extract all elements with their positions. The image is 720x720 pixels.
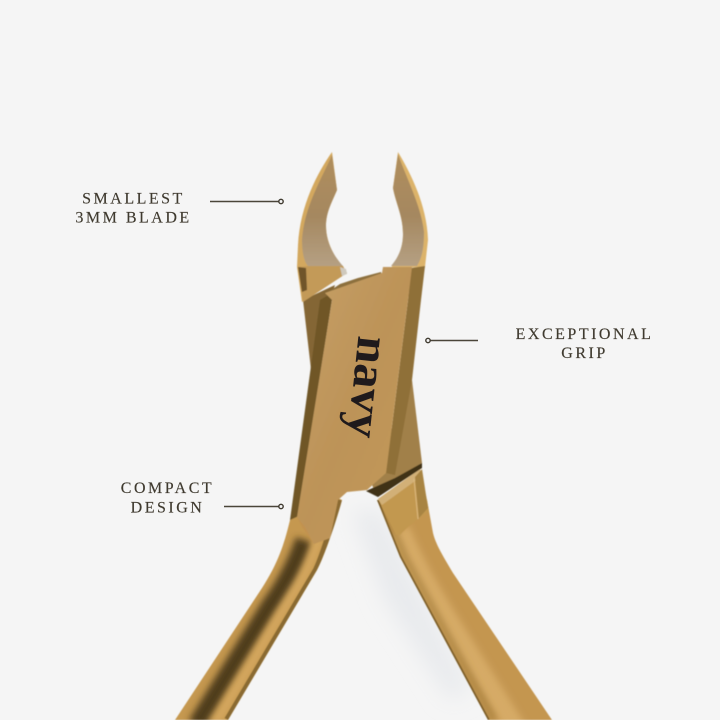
right jaw [391,152,428,268]
left bevel of plate [290,293,332,530]
callout label: 3MM BLADE [75,210,192,226]
callout label: COMPACT [121,480,214,497]
callout: exceptional grip [426,326,653,362]
nipper tool [170,152,560,720]
leader line [224,504,283,509]
soft shadow between handles [352,510,470,700]
left handle shoulder [297,500,338,544]
rear lever behind plate [303,285,422,497]
callout label: DESIGN [131,500,204,516]
left jaw [297,152,347,302]
leader line [210,199,283,204]
callout label: GRIP [561,345,608,362]
infographic canvas [76,152,650,720]
left handle [170,495,350,720]
blade bridge [325,272,382,294]
right bevel of plate [386,266,425,475]
callout label: SMALLEST [82,190,185,208]
callout: smallest 3mm blade [75,190,283,226]
callout label: EXCEPTIONAL [516,326,653,343]
right handle [370,469,560,720]
logo: navy: navy [337,334,399,441]
main front plate [297,267,412,544]
leader line [426,338,478,343]
callout: compact design [121,480,283,516]
